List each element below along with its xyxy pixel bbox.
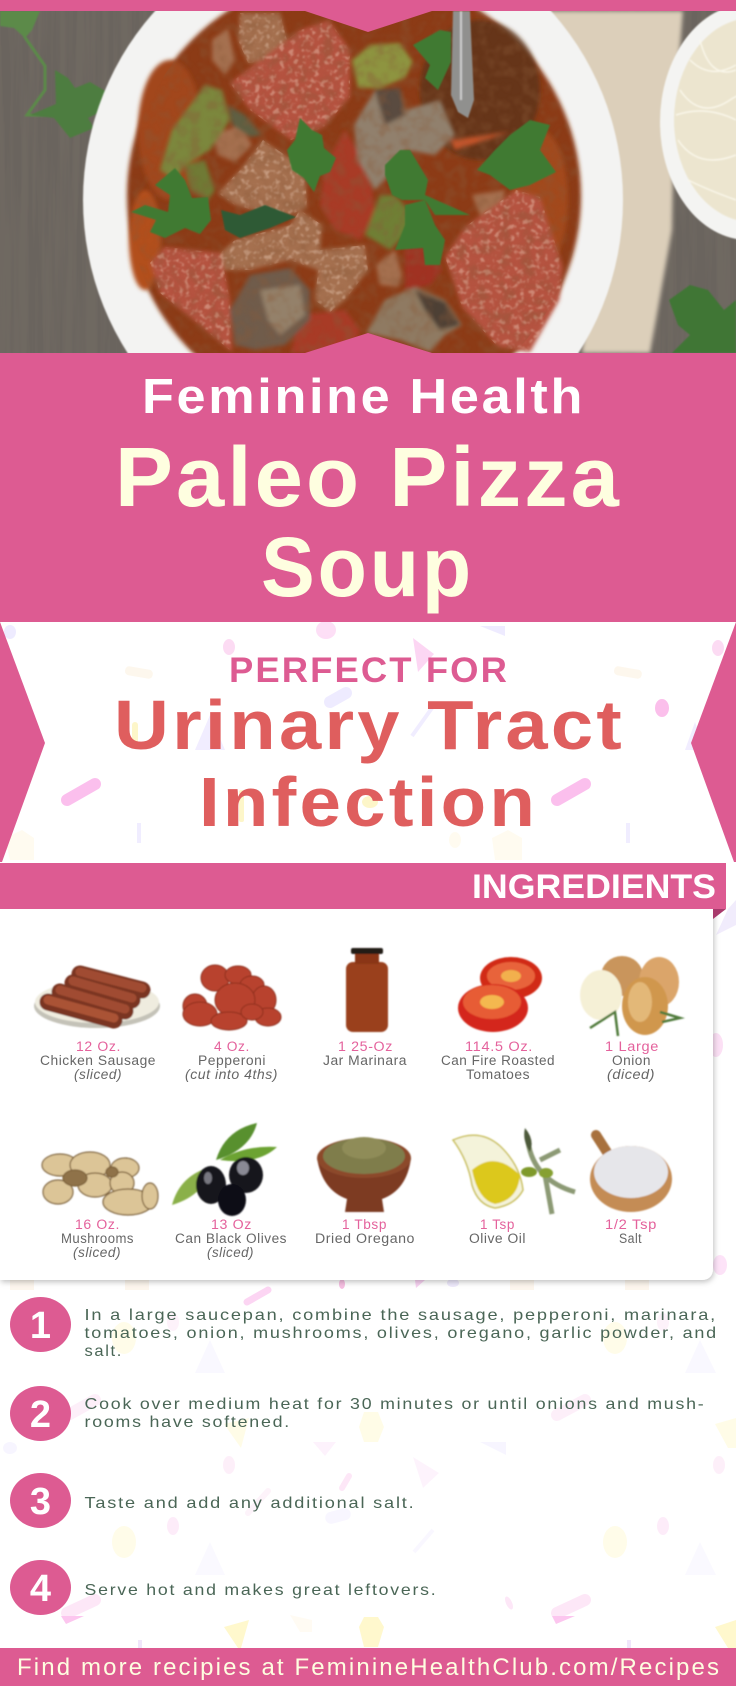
icon: black olives (172, 1123, 277, 1216)
step 4 (10, 1560, 438, 1615)
icon: tomatoes (458, 957, 542, 1032)
step 2 text (84, 1396, 706, 1431)
ingredient names row 1 (40, 1053, 655, 1082)
step 1 badge: 1 (30, 1305, 51, 1347)
step 1 text (84, 1307, 718, 1360)
ingredient names row 2: Mushrooms (61, 1231, 134, 1246)
icon: salt bowl (590, 1135, 672, 1212)
step 2 (10, 1386, 706, 1441)
photo: bowl of pizza soup (0, 11, 736, 353)
step 4 badge: 4 (30, 1568, 51, 1610)
ingredient names row 1: (diced) (607, 1067, 655, 1082)
footer (0, 1648, 736, 1686)
ingredient names row 2 (61, 1231, 642, 1260)
step 3 badge (10, 1473, 71, 1528)
step 3 badge: 3 (30, 1481, 51, 1523)
step 3 text: Taste and add any additional salt. (84, 1495, 416, 1512)
soup (123, 11, 585, 353)
spoon handle (451, 11, 474, 118)
ingredient names row 2: Olive Oil (469, 1231, 526, 1246)
ingredient names row 2: Salt (619, 1231, 642, 1246)
parsley on table, top left (0, 11, 107, 138)
sausage crumbles (212, 13, 505, 312)
parsley on table, bottom right (669, 285, 736, 353)
amount labels row 2: 1/2 Tsp (605, 1217, 657, 1232)
pink top bar with notch (0, 0, 736, 32)
amount labels row 1: 4 Oz. (214, 1039, 250, 1054)
perfect for label: PERFECT FOR (229, 651, 509, 690)
condition heading: Infection (199, 763, 538, 841)
amount labels row 1: 12 Oz. (76, 1039, 121, 1054)
ribbon fold (713, 909, 726, 919)
ingredient names row 1: Pepperoni (198, 1053, 266, 1068)
napkin (540, 11, 683, 353)
step 1 text: tomatoes, onion, mushrooms, olives, oregano, garlic powder, and (84, 1325, 718, 1342)
ingredient names row 1: Tomatoes (466, 1067, 530, 1082)
meat speckle (140, 11, 570, 353)
panel card (0, 909, 713, 1280)
icon: sausage plate (34, 972, 160, 1028)
ingredient names row 1: Onion (612, 1053, 651, 1068)
banner side ribbon right (691, 622, 736, 862)
icon: marinara jar (346, 948, 388, 1032)
step 2 badge: 2 (30, 1394, 51, 1436)
pink title band with bump (0, 333, 736, 622)
main title (115, 430, 622, 614)
soup contents (150, 13, 563, 353)
small cheese bowl (660, 4, 736, 240)
step 1 text: In a large saucepan, combine the sausage, pepperoni, marinara, (84, 1307, 717, 1324)
step 4 badge (10, 1560, 71, 1615)
ingredient names row 1: (sliced) (74, 1067, 122, 1082)
condition heading: Urinary Tract (114, 686, 625, 764)
step 1 (10, 1297, 718, 1360)
ingredient names row 1: Can Fire Roasted (441, 1053, 555, 1068)
footer: Find more recipies at FeminineHealthClub.com/Recipes (17, 1654, 720, 1681)
step 2 badge (10, 1386, 71, 1441)
step 1 text: salt. (84, 1343, 123, 1360)
ingredients header band (0, 863, 726, 909)
ingredient names row 2: (sliced) (73, 1245, 121, 1260)
ingredient names row 1: (cut into 4ths) (185, 1067, 278, 1082)
parsley leaves in soup (131, 30, 556, 265)
green peppers (352, 43, 413, 88)
icon: dried oregano bowl (317, 1137, 411, 1212)
icon: mushrooms (42, 1152, 158, 1215)
background confetti pattern (3, 621, 736, 1648)
amount labels row 1: 114.5 Oz. (465, 1039, 533, 1054)
ingredients heading: INGREDIENTS (472, 868, 716, 906)
mushrooms (354, 88, 455, 190)
wooden table (0, 11, 736, 353)
soup broth shading (129, 20, 568, 290)
ingredient names row 2: (sliced) (207, 1245, 254, 1260)
ingredient names row 2: Dried Oregano (315, 1231, 415, 1246)
main title: Paleo Pizza (115, 430, 622, 524)
step 2 text: rooms have softened. (84, 1414, 291, 1431)
amount labels row 2: 16 Oz. (75, 1217, 120, 1232)
tomato chunks (320, 130, 375, 240)
banner side ribbon left (0, 622, 45, 862)
pepperoni slices (150, 20, 563, 352)
broth speckle (120, 11, 590, 353)
icon: pepperoni (183, 965, 281, 1030)
icon: olive oil (453, 1128, 575, 1214)
supertitle: Feminine Health (142, 370, 585, 424)
step 1 badge (10, 1297, 71, 1352)
step 2 text: Cook over medium heat for 30 minutes or until onions and mush- (84, 1396, 706, 1413)
ingredient names row 1: Chicken Sausage (40, 1053, 156, 1068)
amount labels row 1 (76, 1039, 659, 1054)
condition heading (114, 686, 625, 841)
step 3 (10, 1473, 416, 1528)
main title: Soup (261, 520, 474, 614)
amount labels row 2: 13 Oz (211, 1217, 252, 1232)
amount labels row 1: 1 25-Oz (338, 1039, 393, 1054)
amount labels row 1: 1 Large (605, 1039, 659, 1054)
step 4 text: Serve hot and makes great leftovers. (84, 1582, 438, 1599)
amount labels row 2 (75, 1217, 657, 1232)
ingredient names row 1: Jar Marinara (323, 1053, 407, 1068)
icon: onions (580, 956, 680, 1036)
ingredient names row 2: Can Black Olives (175, 1231, 287, 1246)
amount labels row 2: 1 Tbsp (342, 1217, 387, 1232)
amount labels row 2: 1 Tsp (480, 1217, 515, 1232)
ingredients panel (0, 863, 726, 1280)
white bowl (82, 11, 624, 353)
